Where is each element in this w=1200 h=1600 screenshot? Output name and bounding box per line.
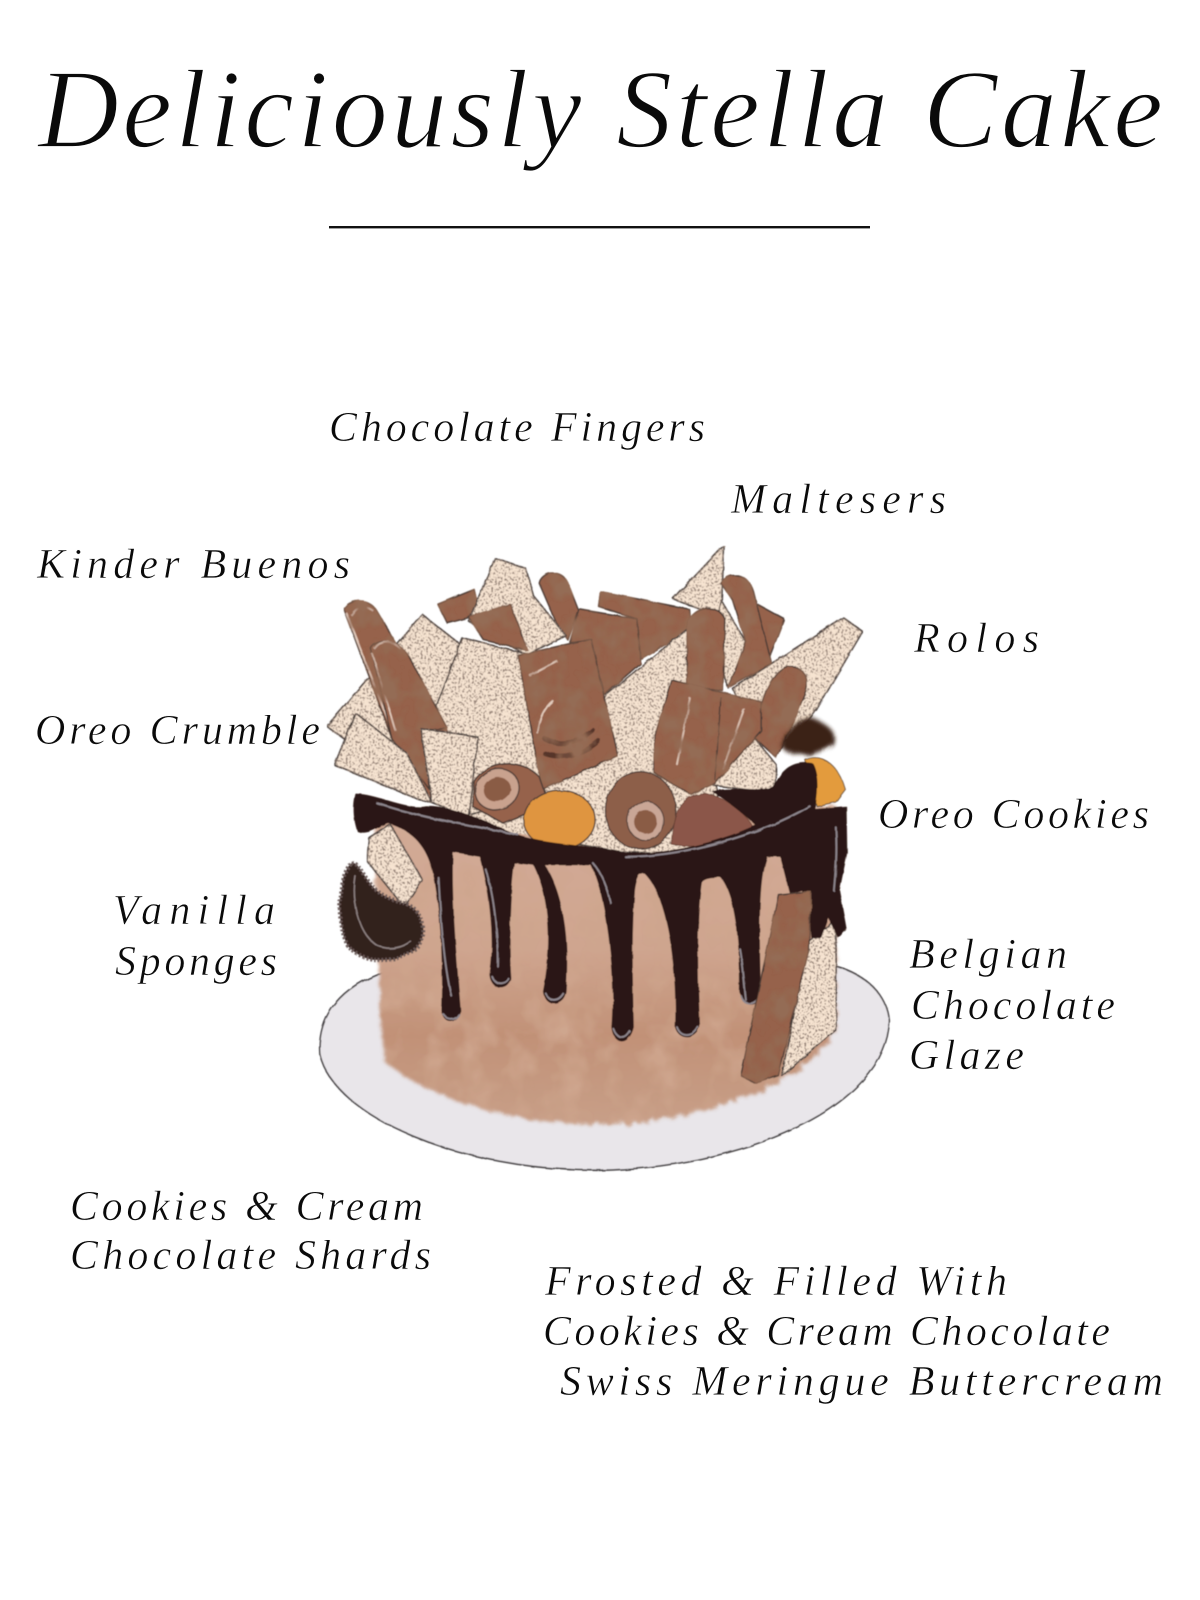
title divider rule — [329, 226, 870, 228]
label: Kinder Buenos: Kinder Buenos — [36, 542, 350, 588]
label: Rolos: Rolos — [913, 616, 1039, 662]
label: Frosted & Filled With Cookies & Cream Chocolate Swiss Meringue Buttercream: Swiss Meringue Buttercream — [560, 1359, 1163, 1405]
label: Oreo Cookies: Oreo Cookies — [878, 792, 1149, 838]
chocolate finger biscuits — [344, 575, 771, 802]
rolo left — [471, 764, 545, 823]
title: Deliciously Stella Cake — [36, 48, 1163, 172]
centre shard — [436, 638, 545, 815]
back layer chocolates — [438, 573, 784, 659]
malteser — [524, 790, 595, 849]
label: Oreo Crumble: Oreo Crumble — [35, 708, 320, 754]
label: Frosted & Filled With Cookies & Cream Chocolate Swiss Meringue Buttercream: Frosted & Filled With — [544, 1259, 1007, 1305]
label: Chocolate Fingers: Chocolate Fingers — [329, 405, 705, 451]
illustration: drip cake — [320, 545, 889, 1170]
label: Maltesers: Maltesers — [730, 477, 946, 523]
front shards — [334, 713, 776, 817]
cake body — [376, 806, 836, 1124]
glaze highlights — [377, 803, 836, 1037]
label: Belgian Chocolate Glaze: Belgian — [909, 932, 1067, 978]
rolo right — [605, 772, 676, 849]
malteser on right edge — [805, 758, 845, 806]
label: Frosted & Filled With Cookies & Cream Chocolate Swiss Meringue Buttercream — [543, 1259, 1163, 1405]
back layer chocolate shards — [327, 545, 863, 853]
label: Cookies & Cream Chocolate Shards — [70, 1184, 431, 1279]
oreo crumble top — [780, 718, 835, 756]
label: Frosted & Filled With Cookies & Cream Chocolate Swiss Meringue Buttercream: Cookies & Cream Chocolate — [543, 1309, 1110, 1355]
large chocolate bar — [518, 639, 618, 789]
label: Vanilla Sponges — [113, 888, 277, 985]
label: Belgian Chocolate Glaze: Glaze — [909, 1033, 1024, 1079]
label: Belgian Chocolate Glaze: Chocolate — [911, 983, 1115, 1029]
oreo half — [340, 863, 423, 960]
right finger and folded chocolate bar — [654, 666, 807, 794]
cake plate — [320, 941, 889, 1170]
chocolate glaze with drips — [354, 763, 847, 1041]
label: Vanilla Sponges: Sponges — [115, 939, 277, 985]
oreo crumble piece — [671, 794, 755, 846]
label: Cookies & Cream Chocolate Shards: Cookies & Cream — [70, 1184, 423, 1230]
label: Cookies & Cream Chocolate Shards: Chocolate Shards — [70, 1233, 431, 1279]
left shard on glaze — [367, 824, 422, 907]
chocolate shard on cake side right — [781, 920, 837, 1076]
label: Belgian Chocolate Glaze — [909, 932, 1115, 1079]
label: Vanilla Sponges: Vanilla — [113, 888, 275, 934]
square chocolate bars — [468, 604, 641, 695]
chocolate finger on cake side — [741, 891, 811, 1083]
